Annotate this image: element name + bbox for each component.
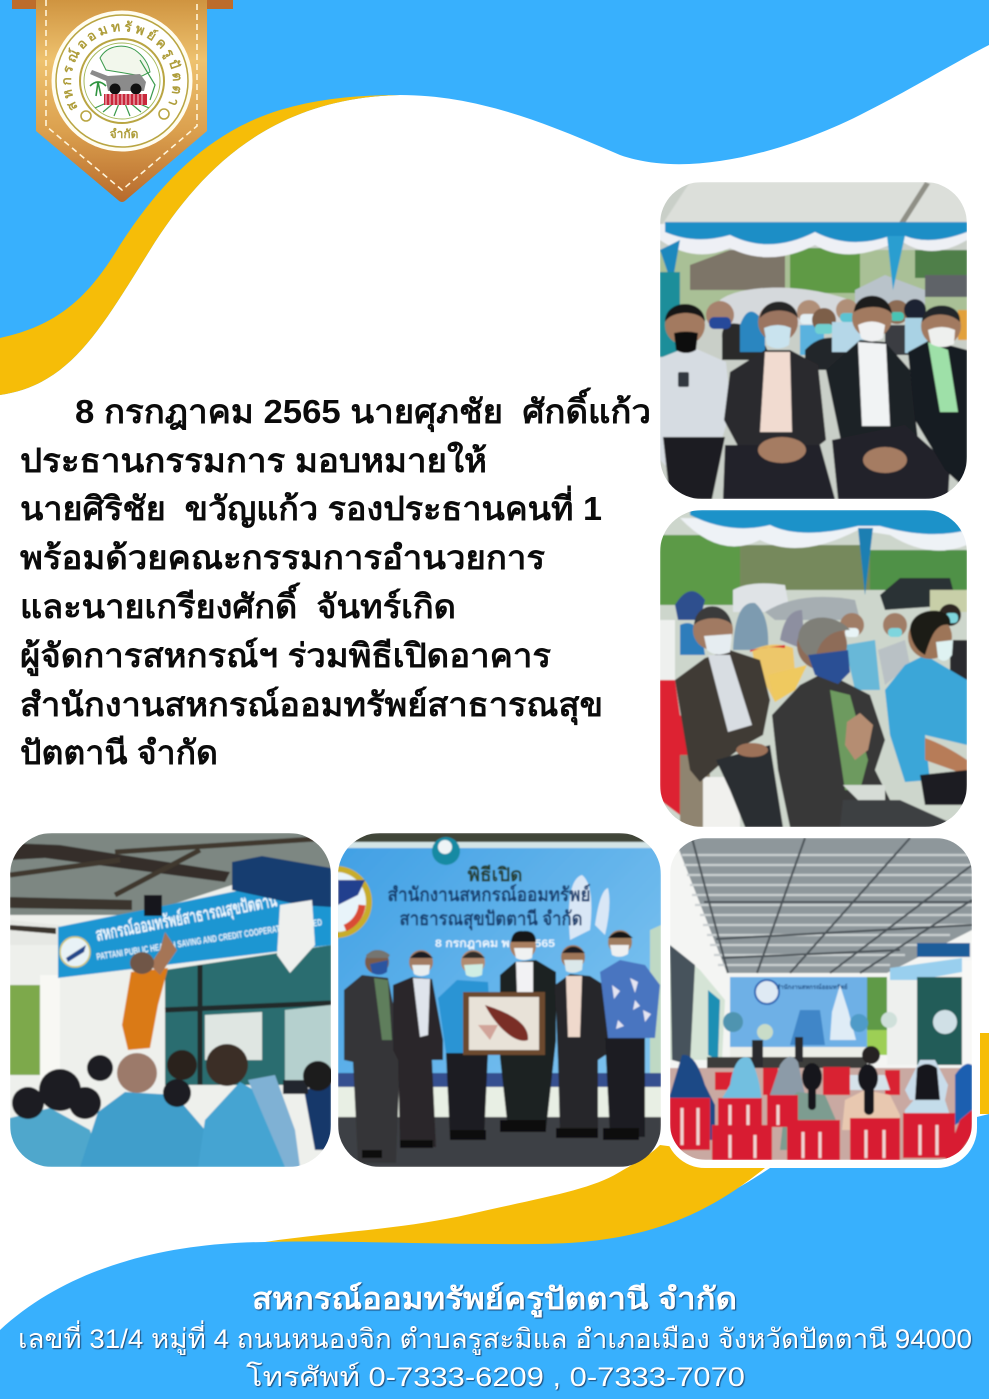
man in grey jacket bbox=[675, 606, 783, 827]
metal roof bbox=[678, 838, 972, 973]
footer contact block bbox=[18, 1282, 972, 1392]
tent canopy bbox=[664, 182, 966, 224]
ribbon badge with logo bbox=[12, 0, 233, 202]
man in blue patterned shirt bbox=[885, 611, 967, 805]
audience and red chairs bbox=[670, 1046, 972, 1160]
rabbit art bbox=[569, 875, 609, 940]
main announcement text: 8 กรกฎาคม 2565 นายศุภชัย ศักดิ์แก้ว bbox=[75, 387, 651, 433]
photo: seated guests under tent bbox=[660, 510, 967, 827]
seal cannon bbox=[90, 70, 146, 91]
seal red abacus bbox=[104, 94, 147, 105]
monk in orange robe bbox=[122, 932, 177, 1050]
ribbon body bbox=[36, 0, 207, 202]
logo seal bbox=[52, 10, 192, 152]
backdrop logo bbox=[338, 865, 374, 939]
event backdrop title: พิธีเปิด bbox=[467, 864, 523, 886]
man fifth dark suit bbox=[555, 945, 613, 1137]
photo white border bbox=[665, 833, 977, 1168]
event backdrop title: 8 กรกฎาคม พ.ศ. 2565 bbox=[435, 938, 555, 950]
ceiling structure bbox=[10, 833, 331, 915]
ribbon tabs bbox=[12, 0, 233, 9]
navy duct box bbox=[232, 856, 331, 907]
man with green shirt bbox=[908, 306, 967, 490]
man left dark jacket bbox=[344, 950, 400, 1163]
photo: monk unveiling sign bbox=[10, 833, 333, 1167]
seal landscape bbox=[100, 46, 150, 76]
event backdrop title: สาธารณสุขปัตตานี จำกัด bbox=[400, 908, 582, 931]
event backdrop title bbox=[388, 864, 590, 950]
blue cooperative sign: PATTANI PUBLIC HEALTH SAVING AND CREDIT COOPERATIVES LIMITED bbox=[96, 917, 323, 963]
man second grey suit bbox=[393, 950, 443, 1147]
man with pink shirt bbox=[723, 302, 835, 499]
photo: group with framed gift bbox=[303, 833, 661, 1167]
main announcement text bbox=[20, 387, 651, 771]
man with blue mask and praying hands bbox=[772, 618, 960, 827]
stage backdrop bbox=[730, 977, 867, 1047]
walls, glass and greenery bbox=[867, 977, 887, 1037]
seal small emblems bbox=[81, 111, 91, 121]
yellow accent right edge bbox=[980, 1033, 989, 1114]
main announcement text: ผู้จัดการสหกรณ์ฯ ร่วมพิธีเปิดอาคาร bbox=[20, 637, 551, 677]
crowd in blue shirts bbox=[10, 1044, 333, 1167]
man in blue shirt bbox=[438, 950, 492, 1140]
man with white shirt and black jacket bbox=[826, 296, 950, 499]
left tent curtains bbox=[670, 945, 725, 1060]
shoes bbox=[362, 1120, 639, 1158]
black speaker bbox=[144, 895, 162, 916]
seal lower word: จำกัด bbox=[110, 127, 139, 141]
floor and lower backdrop bbox=[338, 1073, 661, 1087]
plants right bbox=[650, 925, 661, 1080]
main announcement text: และนายเกรียงศักดิ์ จันทร์เกิด bbox=[20, 582, 456, 625]
main announcement text: พร้อมด้วยคณะกรรมการอำนวยการ bbox=[20, 539, 545, 576]
photo: audience facing stage bbox=[665, 833, 977, 1168]
ribbon stitching bbox=[46, 0, 197, 190]
photo: seated committee members bbox=[660, 182, 967, 499]
framed gift bbox=[463, 992, 545, 1055]
main announcement text: นายศิริชัย ขวัญแก้ว รองประธานคนที่ 1 bbox=[20, 485, 602, 528]
yellow wave bottom bbox=[265, 1145, 775, 1244]
man right floral shirt bbox=[600, 930, 660, 1137]
top strip and drape bbox=[338, 833, 661, 842]
blue cooperative sign bbox=[57, 890, 331, 979]
back row guests bbox=[660, 272, 967, 370]
trees and pillar bbox=[10, 985, 40, 1075]
blue cooperative sign: สหกรณ์ออมทรัพย์สาธารณสุขปัตตานี bbox=[94, 889, 279, 947]
background crowd bbox=[660, 591, 967, 690]
tent valance bbox=[680, 518, 967, 551]
white curtain bbox=[277, 900, 315, 973]
main announcement text: ปัตตานี จำกัด bbox=[20, 734, 218, 771]
address: เลขที่ 31/4 หมู่ที่ 4 ถนนหนองจิก ตำบลรูสะมิแล อำเภอเมือง จังหวัดปัตตานี 94000 bbox=[18, 1320, 972, 1355]
main announcement text: สำนักงานสหกรณ์ออมทรัพย์สาธารณสุข bbox=[20, 686, 603, 726]
main announcement text: ประธานกรรมการ มอบหมายให้ bbox=[20, 441, 487, 479]
red and yellow chairs bbox=[660, 644, 807, 827]
blue box and hanging sign bbox=[917, 943, 970, 957]
telephone: โทรศัพท์ 0-7333-6209 , 0-7333-7070 bbox=[246, 1361, 745, 1392]
flowers and stage bbox=[723, 1012, 743, 1032]
man center black suit bbox=[500, 931, 556, 1130]
trees and cars bbox=[660, 535, 740, 605]
stage backdrop: สำนักงานสหกรณ์ออมทรัพย์ bbox=[776, 983, 848, 991]
valance bbox=[660, 224, 967, 257]
man with black mask bbox=[660, 304, 731, 499]
yellow wave top bbox=[0, 95, 400, 395]
door frame and glass bbox=[58, 975, 170, 1090]
event backdrop title: สำนักงานสหกรณ์ออมทรัพย์ bbox=[388, 884, 590, 906]
background trees and cars bbox=[660, 250, 967, 320]
organisation name: สหกรณ์ออมทรัพย์ครูปัตตานี จำกัด bbox=[252, 1282, 737, 1318]
